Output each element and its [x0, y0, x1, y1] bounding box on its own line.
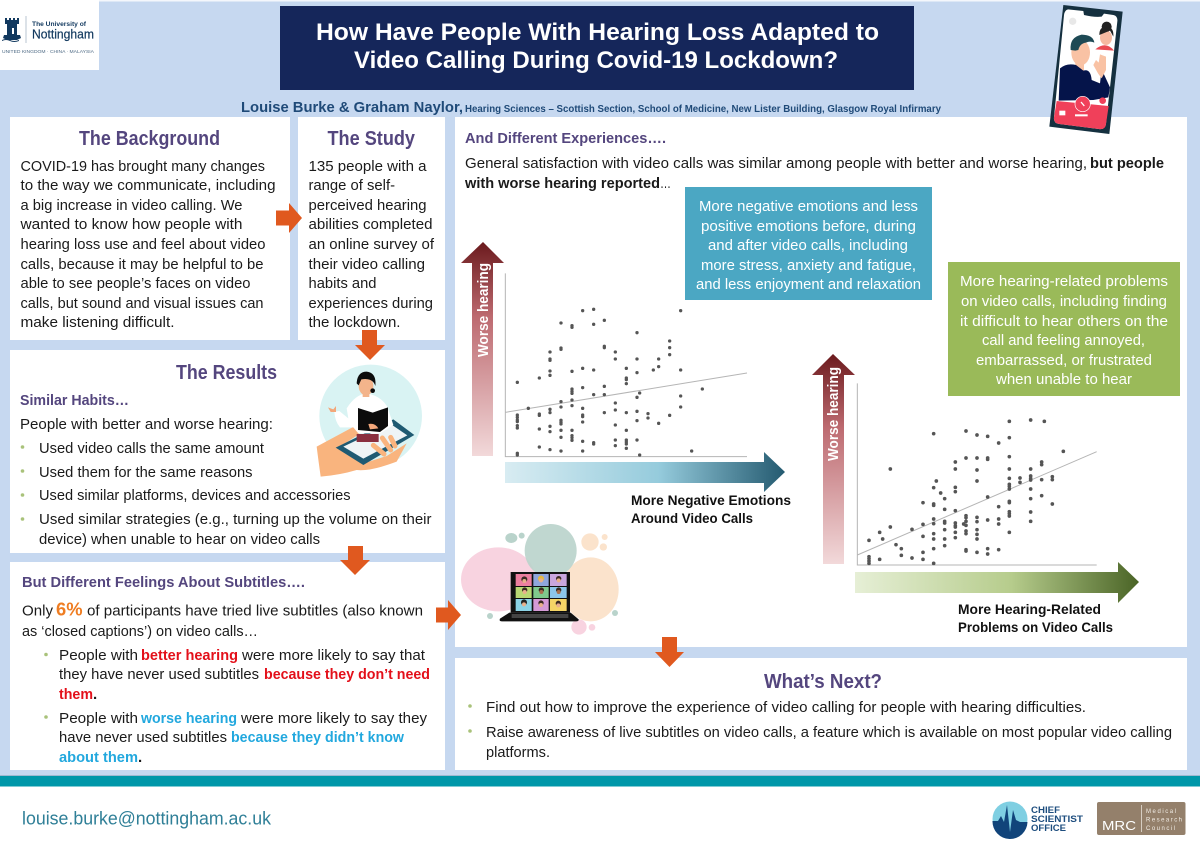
text block: study: 135 people with a [308, 158, 427, 175]
callout: hearing-related problems [948, 262, 1180, 396]
text block: study: range of self- [308, 177, 395, 194]
text block: worse hearing: were more likely to say they [240, 710, 427, 727]
label: more hearing-related problems [958, 601, 1113, 635]
text block: better hearing: them [59, 686, 93, 703]
text block: only 6%: Only [22, 602, 54, 620]
logo: Medical Research Council: Council [1146, 826, 1175, 832]
text block: background: hearing loss use and feel about video [20, 236, 266, 253]
text block: similar habits list: device) when unable to hear on video calls [39, 531, 320, 548]
footer band [0, 776, 1200, 851]
text block: background [19, 158, 276, 331]
logo: University of Nottingham [0, 0, 99, 70]
callout: negative emotions: positive emotions before, during [701, 218, 916, 235]
callout: negative emotions: and after video calls, including [708, 237, 908, 254]
text block: only 6%: as ‘closed captions’) on video calls… [22, 623, 258, 640]
arrow: worse hearing (chart 1) [461, 242, 504, 456]
callout: negative emotions: more stress, anxiety and fatigue, [701, 257, 916, 274]
heading: what's next: What’s Next? [764, 671, 882, 693]
text block: only 6%: of participants have tried live subtitles (also known [87, 602, 423, 620]
arrow: background to study [276, 203, 302, 233]
text block: study: the lockdown. [308, 314, 400, 331]
logo: University of Nottingham: UNITED KINGDOM · CHINA · MALAYSIA [2, 49, 94, 54]
label: more negative emotions: More Negative Emotions [631, 492, 791, 508]
authors and affiliation [241, 99, 941, 116]
text block: next steps [468, 699, 1172, 761]
text block: similar habits list: Used video calls the same amount [39, 440, 265, 457]
text block: satisfaction intro: … [660, 175, 671, 192]
text block: study: an online survey of [308, 236, 435, 253]
logo: Chief Scientist Office: CHIEF [1031, 805, 1060, 816]
text block: similar habits list: People with better and worse hearing: [20, 416, 273, 433]
text block: background: COVID-19 has brought many changes [20, 158, 265, 175]
text block: next steps: platforms. [486, 744, 550, 761]
text block: next steps: Raise awareness of live subtitles on video calls, a feature which is available on most popular video calling [486, 724, 1172, 741]
text block: similar habits list [20, 416, 432, 548]
text block: better hearing: were more likely to say that [241, 647, 426, 664]
title [280, 6, 914, 90]
text block: background: a big increase in video calling. We [20, 197, 242, 214]
text block: better hearing: they have never used subtitles [59, 666, 259, 683]
text block: satisfaction intro: General satisfaction with video calls was similar among people with better and worse hearing, [465, 155, 1087, 172]
text block: study [308, 158, 435, 331]
callout: hearing-related problems: it difficult to hear others on the [960, 313, 1168, 330]
text block: similar habits list: Used similar strategies (e.g., turning up the volume on their [39, 511, 432, 528]
callout: hearing-related problems: call and feeling annoyed, [982, 332, 1145, 349]
title: How Have People With Hearing Loss Adapted to [316, 19, 879, 46]
logo: Medical Research Council: Medical [1146, 809, 1176, 815]
logo: Medical Research Council [1097, 802, 1186, 835]
text block: study: habits and [308, 275, 376, 292]
text block: satisfaction intro: with worse hearing reported [464, 175, 660, 192]
text block: worse hearing: because they didn’t know [231, 729, 404, 746]
arrow: results to subtitles [340, 546, 370, 575]
logo: University of Nottingham: The University of [32, 21, 87, 28]
icon: laptop with video call [461, 524, 619, 635]
text block: worse hearing: about them [59, 749, 138, 766]
label: more hearing-related problems: More Hearing-Related [958, 601, 1101, 617]
text block: similar habits list: Used them for the same reasons [39, 464, 252, 481]
text block: similar habits list: Used similar platforms, devices and accessories [39, 487, 350, 504]
label: more negative emotions [631, 492, 791, 526]
text block: better hearing: People with [59, 647, 138, 664]
chart: worse hearing vs negative emotions [461, 242, 791, 526]
text block: satisfaction intro [464, 155, 1164, 192]
callout: negative emotions: and less enjoyment and relaxation [696, 276, 921, 293]
arrow: experiences to what's next [655, 637, 684, 667]
chart: worse hearing vs hearing-related problems [812, 354, 1139, 635]
authors and affiliation: Hearing Sciences – Scottish Section, School of Medicine, New Lister Building, Glasgow Royal Infirmary [465, 103, 941, 115]
text block: better hearing: . [93, 686, 97, 703]
text block: worse hearing [44, 710, 427, 766]
text block: study: their video calling [308, 256, 425, 273]
illustration: phone video call [1049, 5, 1123, 134]
text block: satisfaction intro: but people [1090, 155, 1164, 172]
text block: background: to the way we communicate, including [20, 177, 276, 194]
panel: the background [10, 117, 290, 340]
text block: study: perceived hearing [308, 197, 426, 214]
arrow: worse hearing (chart 2) [812, 354, 855, 564]
text block: background: make listening difficult. [20, 314, 174, 331]
heading: the results: The Results [176, 362, 277, 384]
panel: what's next [455, 658, 1187, 770]
title: Video Calling During Covid-19 Lockdown? [354, 47, 838, 74]
text block: only 6% [22, 600, 423, 640]
text block: better hearing: because they don’t need [264, 666, 430, 683]
authors and affiliation: Louise Burke & Graham Naylor, [241, 99, 463, 116]
logo: Chief Scientist Office: OFFICE [1031, 823, 1066, 834]
arrow: subtitles to experiences [436, 600, 461, 630]
panel: the results [10, 350, 445, 553]
callout: hearing-related problems: embarrassed, or frustrated [976, 352, 1152, 369]
text block: worse hearing: worse hearing [140, 710, 237, 727]
panel: feelings about subtitles [10, 562, 445, 770]
text block: background: calls, because it may be helpful to be [20, 256, 264, 273]
text block: background: able to see people’s faces on video [20, 275, 250, 292]
callout: hearing-related problems: when unable to hear [995, 371, 1132, 388]
text block: better hearing [44, 647, 430, 703]
text block: next steps: Find out how to improve the experience of video calling for people with hearing difficulties. [486, 699, 1086, 716]
logo: University of Nottingham: Nottingham [32, 28, 94, 42]
text block: study: experiences during [308, 295, 433, 312]
label: more hearing-related problems: Problems on Video Calls [958, 619, 1113, 635]
text block: worse hearing: have never used subtitles [59, 729, 227, 746]
logo: Medical Research Council: MRC [1102, 818, 1136, 833]
text block: study: abilities completed [308, 216, 432, 233]
arrow: more hearing-related problems [855, 562, 1139, 603]
heading: the background: The Background [79, 128, 220, 150]
callout: negative emotions: More negative emotions and less [699, 198, 918, 215]
scatter plot 1 [505, 273, 747, 457]
heading: and different experiences: And Different Experiences…. [465, 130, 666, 147]
callout: negative emotions [685, 187, 932, 300]
label: more negative emotions: Around Video Calls [631, 510, 753, 526]
contact email: louise.burke@nottingham.ac.uk [22, 808, 272, 828]
callout: hearing-related problems: More hearing-related problems [960, 273, 1168, 290]
text block: worse hearing: . [138, 749, 142, 766]
text block: better hearing: better hearing [141, 647, 238, 664]
subheading: different feelings: But Different Feelings About Subtitles…. [22, 574, 305, 591]
logo: Medical Research Council: Research [1146, 818, 1182, 824]
scatter plot 2 [857, 383, 1097, 565]
text block: background: calls, but sound and visual issues can [20, 295, 264, 312]
callout: hearing-related problems: on video calls, including finding [961, 293, 1167, 310]
text block: background: wanted to know how people with [19, 216, 243, 233]
heading: the study: The Study [328, 128, 416, 150]
logo: Chief Scientist Office [992, 802, 1083, 839]
panel: the study [298, 117, 445, 340]
arrow: worse hearing (chart 1): Worse hearing [475, 263, 492, 357]
subheading: similar habits: Similar Habits… [20, 392, 129, 409]
text block: only 6%: 6% [56, 600, 82, 620]
arrow: study to results [355, 330, 385, 360]
logo: Chief Scientist Office: SCIENTIST [1031, 814, 1083, 825]
text block: worse hearing: People with [59, 710, 138, 727]
icon: woman reading on phone [317, 365, 422, 477]
arrow: worse hearing (chart 2): Worse hearing [825, 367, 842, 461]
arrow: more negative emotions [505, 452, 785, 492]
